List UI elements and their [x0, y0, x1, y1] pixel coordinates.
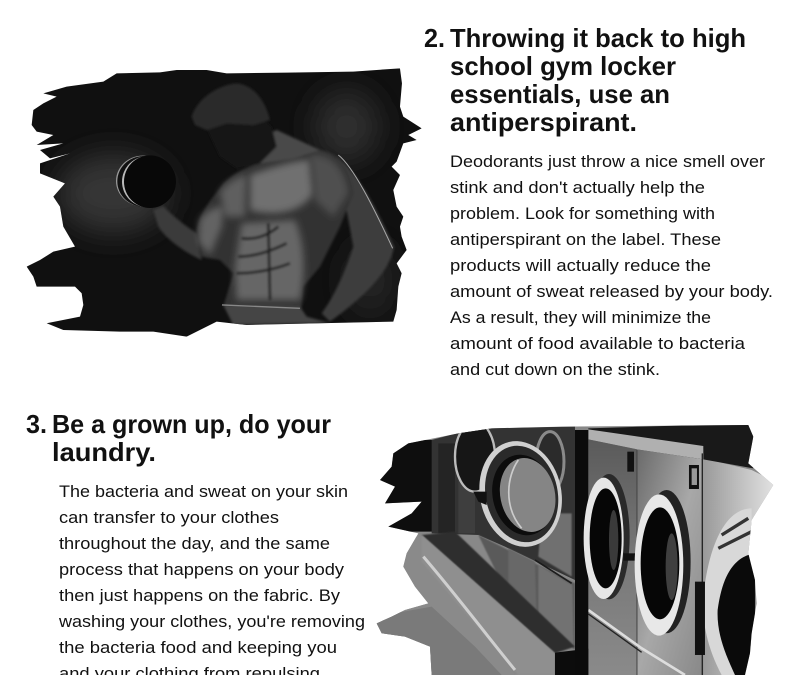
shoulder and chest highlights [250, 160, 313, 213]
text: tip 2 body: amount of sweat released by your body. [450, 282, 773, 301]
floor [376, 536, 432, 672]
text: tip 2 body: antiperspirant on the label. These [450, 230, 721, 249]
neck and head [260, 129, 318, 164]
text: tip 3 body: washing your clothes, you're removing [58, 612, 365, 631]
text: tip 3 body [58, 482, 365, 675]
text: tip 2 body: Deodorants just throw a nice smell over [450, 152, 765, 171]
right arm [322, 157, 394, 322]
post [575, 430, 588, 675]
heading: tip 2: Throwing it back to high [450, 23, 746, 53]
heading: tip 2: 2. [424, 23, 445, 53]
heading: tip 3: laundry. [52, 437, 156, 467]
hair [192, 83, 270, 130]
text: tip 3 body: can transfer to your clothes [59, 508, 279, 527]
heading: tip 3: 3. [26, 409, 47, 439]
heading: tip 3: Be a grown up, do your [52, 409, 331, 439]
text: tip 2 body: problem. Look for something with [450, 204, 715, 223]
heading: tip 2: essentials, use an [450, 79, 670, 109]
text: tip 2 body: As a result, they will minimize the [450, 308, 711, 327]
text: tip 3 body: the bacteria food and keeping you [59, 638, 337, 657]
right machine panels [588, 430, 637, 675]
rim light [338, 155, 393, 248]
heading: tip 2 [424, 23, 746, 137]
text: tip 3 body: throughout the day, and the same [59, 534, 330, 553]
text: tip 2 body: and cut down on the stink. [450, 360, 660, 379]
torso [197, 140, 353, 308]
heading: tip 3 [26, 409, 331, 467]
big open door [473, 441, 562, 547]
jeans [223, 305, 330, 325]
text: tip 3 body: The bacteria and sweat on your skin [59, 482, 348, 501]
text: tip 2 body: stink and don't actually help the [450, 178, 705, 197]
dumbbell [116, 155, 176, 208]
door 3 [635, 490, 691, 636]
abs [235, 220, 304, 300]
text: tip 3 body: then just happens on the fabric. By [59, 586, 341, 605]
raised step [422, 532, 575, 653]
door 4 [695, 508, 755, 675]
text: tip 2 body: products will actually reduce the [450, 256, 711, 275]
photo: bodybuilder lifting dumbbell [20, 60, 427, 340]
forearm [153, 206, 202, 260]
photo: row of laundromat washing machines [375, 420, 782, 675]
text: tip 3 body: process that happens on your body [59, 560, 345, 579]
left wall, dark [380, 440, 432, 532]
man [153, 83, 394, 325]
lower cabinets [478, 535, 575, 650]
heading: tip 2: antiperspirant. [450, 107, 637, 137]
heading: tip 2: school gym locker [450, 51, 676, 81]
text: tip 2 body [450, 152, 773, 379]
door 2 [584, 474, 630, 599]
text: tip 2 body: amount of food available to bacteria [450, 334, 746, 353]
small far doors [455, 422, 495, 492]
